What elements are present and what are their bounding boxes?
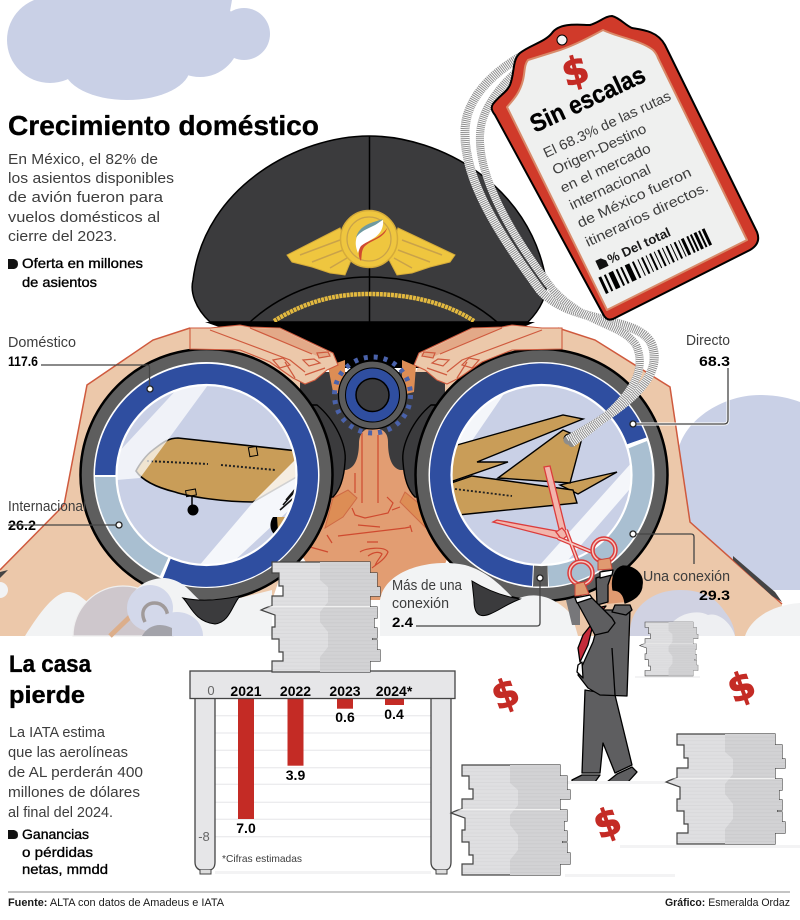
paper stack on table (260, 562, 385, 674)
legend: seats in millions (8, 255, 143, 290)
background clouds top and right (7, 0, 800, 590)
credit: Gráfico: Esmeralda Ordaz (665, 897, 790, 909)
year labels: 2023 (329, 683, 361, 699)
face (295, 420, 455, 600)
right lens view with plane (452, 386, 630, 564)
arms (0, 328, 782, 636)
callout: Una conexión: 29.3 (699, 587, 730, 603)
pilot cap (192, 136, 546, 322)
callout: Doméstico (8, 335, 153, 392)
jacket (578, 610, 630, 696)
tag heading: Sin escalas (526, 61, 650, 138)
table legs (195, 698, 215, 870)
intro text: vuelos domésticos al (8, 209, 160, 226)
price tag: Sin escalas (492, 16, 758, 320)
callout: Más de una conexión: 2.4 (392, 614, 413, 630)
scissors (493, 466, 616, 584)
callout: Doméstico: 117.6 (8, 353, 38, 369)
title: Crecimiento doméstico (8, 110, 319, 141)
tag body text: Origen-Destino (550, 120, 649, 178)
callout: Internacional (8, 499, 122, 533)
axis labels: -8 (198, 829, 210, 844)
section heading: La casa pierde: La casa (9, 651, 91, 678)
paper stack bottom right (665, 734, 790, 846)
right donut segment: Directo 68.3 (430, 363, 646, 586)
tag body text: El 68.3% de las rutas (541, 87, 673, 161)
gridlines (215, 716, 431, 837)
cheeks (325, 490, 425, 528)
legend: net profit or loss: Ganancias (22, 826, 89, 842)
bars (238, 699, 404, 819)
focus wheel (334, 357, 410, 433)
right donut segment: Más de una conexión 2.4 (533, 564, 548, 586)
collar (612, 605, 632, 615)
paper stack bottom centre (450, 765, 575, 877)
binoculars body (300, 372, 445, 470)
dollar icons (485, 662, 761, 848)
callout: Más de una conexión: Más de una (392, 578, 463, 594)
section heading: La casa pierde: pierde (9, 682, 85, 709)
cap gold cord (274, 294, 474, 321)
intro text: En México, el 82% de (8, 151, 158, 168)
callout: Doméstico: Doméstico (8, 335, 76, 351)
binocular underside shadows (183, 581, 520, 624)
axis labels: 0 (207, 683, 215, 698)
legend: net profit or loss (8, 826, 108, 877)
year labels: 2022 (280, 683, 311, 699)
tag dollar icon: $ (557, 46, 594, 96)
tag body text: internacional (567, 161, 653, 213)
legs (582, 690, 632, 773)
grey shadow behind man (566, 596, 580, 625)
face (607, 576, 626, 604)
tag body text: itinerarios directos. (583, 179, 711, 250)
paper stack small (639, 622, 700, 677)
section body text: de AL perderán 400 (8, 764, 143, 781)
table top (190, 671, 455, 698)
tag strings (465, 40, 654, 443)
value labels: 0.4 (384, 706, 404, 722)
footer (8, 892, 790, 909)
section body text: La IATA estima (9, 724, 106, 741)
outer arm (577, 598, 615, 635)
right donut segment: Una conexión 29.3 (548, 441, 652, 586)
bar chart table (190, 671, 455, 874)
legend: seats in millions: de asientos (22, 274, 97, 290)
callout: Una conexión (630, 531, 730, 603)
value labels: 0.6 (335, 709, 355, 725)
year labels: 2021 (230, 683, 262, 699)
callout: Directo (630, 333, 730, 427)
floor shadows (215, 676, 800, 877)
cap emblem wings (287, 210, 455, 275)
section body text (8, 724, 143, 821)
axis labels (198, 683, 215, 844)
right hand fingers (414, 325, 562, 384)
footnote: *Cifras estimadas (222, 853, 302, 865)
ground clouds (0, 563, 800, 636)
tie (578, 606, 606, 662)
hair (612, 566, 642, 603)
hands (575, 558, 612, 596)
right lens: route types donut (416, 349, 668, 601)
tag body text (541, 87, 711, 250)
section body text: al final del 2024. (8, 804, 113, 821)
dollar icons: $ (587, 798, 627, 848)
callout: Directo: 68.3 (699, 353, 730, 369)
callout: Una conexión: Una conexión (643, 569, 730, 585)
jacket crease (612, 648, 615, 695)
section body text: millones de dólares (8, 784, 140, 801)
orange palms behind focus wheel (328, 360, 416, 395)
nose and mouth lines (310, 433, 412, 568)
intro text (8, 151, 174, 245)
left lens: domestic vs international donut (80, 349, 332, 601)
year labels: 2024* (376, 683, 413, 699)
value labels: 7.0 (236, 820, 256, 836)
intro text: de avión fueron para (8, 189, 164, 206)
section heading: La casa pierde (9, 651, 91, 709)
dollar icons: $ (485, 669, 525, 719)
left hand fingers (190, 325, 338, 384)
callout: Directo: Directo (686, 333, 730, 349)
tag barcode (598, 228, 712, 294)
shirt (577, 662, 583, 678)
year labels (230, 683, 413, 699)
intro text: cierre del 2023. (8, 228, 117, 245)
man in suit (572, 558, 642, 782)
inner raised arm (596, 573, 612, 605)
legend: seats in millions: Oferta en millones (22, 255, 143, 271)
visor (205, 322, 535, 368)
shoes (572, 767, 637, 782)
left lens view with plane (118, 386, 296, 564)
tag legend: % Del total (605, 224, 673, 267)
legend: net profit or loss: netas, mmdd (22, 861, 108, 877)
callout: Más de una conexión: conexión (392, 596, 449, 612)
tag body text: de México fueron (575, 164, 694, 231)
intro text: los asientos disponibles (8, 170, 174, 187)
callout: Internacional: Internacional (8, 499, 86, 515)
binocular side bulges (300, 405, 450, 500)
left donut segment: Doméstico 117.6 (95, 364, 318, 587)
callout: Internacional: 26.2 (8, 517, 36, 533)
legend: net profit or loss: o pérdidas (22, 844, 93, 860)
value labels (236, 706, 404, 836)
source: Fuente: ALTA con datos de Amadeus e IATA (8, 897, 225, 909)
value labels: 3.9 (286, 767, 305, 783)
tag body text: en el mercado (558, 140, 653, 196)
section body text: que las aerolíneas (8, 744, 128, 761)
callout: Más de una conexión (392, 575, 543, 630)
dollar icons: $ (721, 662, 761, 712)
left donut segment: Internacional 26.2 (95, 477, 169, 576)
